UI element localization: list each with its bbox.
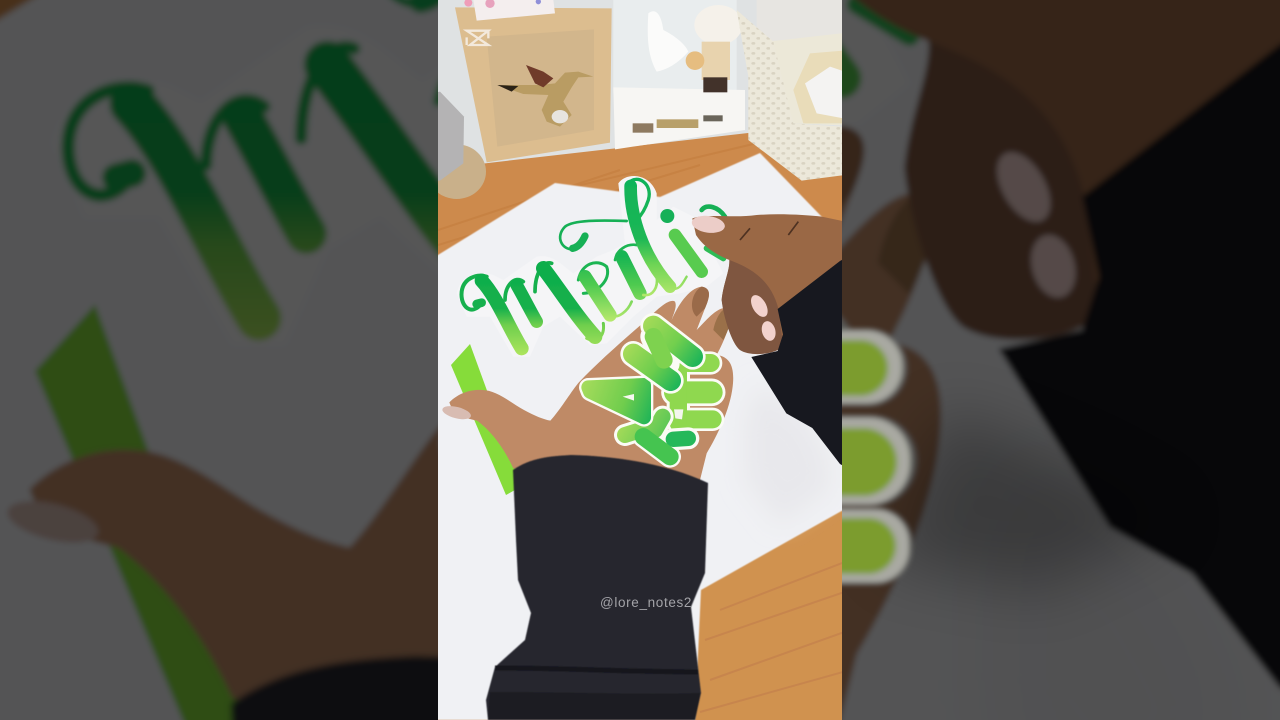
wooden frame box: [455, 7, 612, 162]
sticker edges: [842, 326, 915, 587]
panel: centre video frame: [425, 0, 870, 720]
grey planter: [430, 92, 464, 181]
shelf objects: [427, 0, 870, 199]
right sleeve: [751, 245, 870, 480]
white lamp: [648, 11, 688, 72]
back wall: [438, 0, 842, 164]
white paper sheets: [425, 153, 870, 720]
wooden desk: [425, 120, 865, 720]
picture card on box: [473, 0, 555, 21]
left sleeve: [486, 455, 708, 720]
lettering sticker halo: [618, 176, 657, 198]
white stand: [613, 87, 745, 149]
panel: left blurred backdrop: [0, 0, 438, 720]
doily: [427, 144, 486, 199]
sticker: letter T: [625, 417, 688, 457]
green letter stickers: [588, 326, 713, 457]
sticker: back letter: [674, 363, 713, 423]
left open hand: [441, 287, 733, 480]
doll figure: [686, 5, 742, 92]
sticker: letter A: [588, 385, 644, 417]
green paper strip: [451, 344, 516, 495]
panel: right blurred backdrop: [842, 0, 1280, 720]
watermark: @lore_notes2: [600, 595, 692, 610]
hummingbird cut-out: [497, 65, 593, 127]
white basket: [737, 10, 842, 181]
lettering: Media: [462, 179, 725, 348]
paper shadow under hand: [898, 414, 1138, 596]
right hand holding letter: [691, 214, 870, 354]
sticker: letter M: [633, 326, 693, 381]
CapCut logo mark: [467, 31, 488, 45]
